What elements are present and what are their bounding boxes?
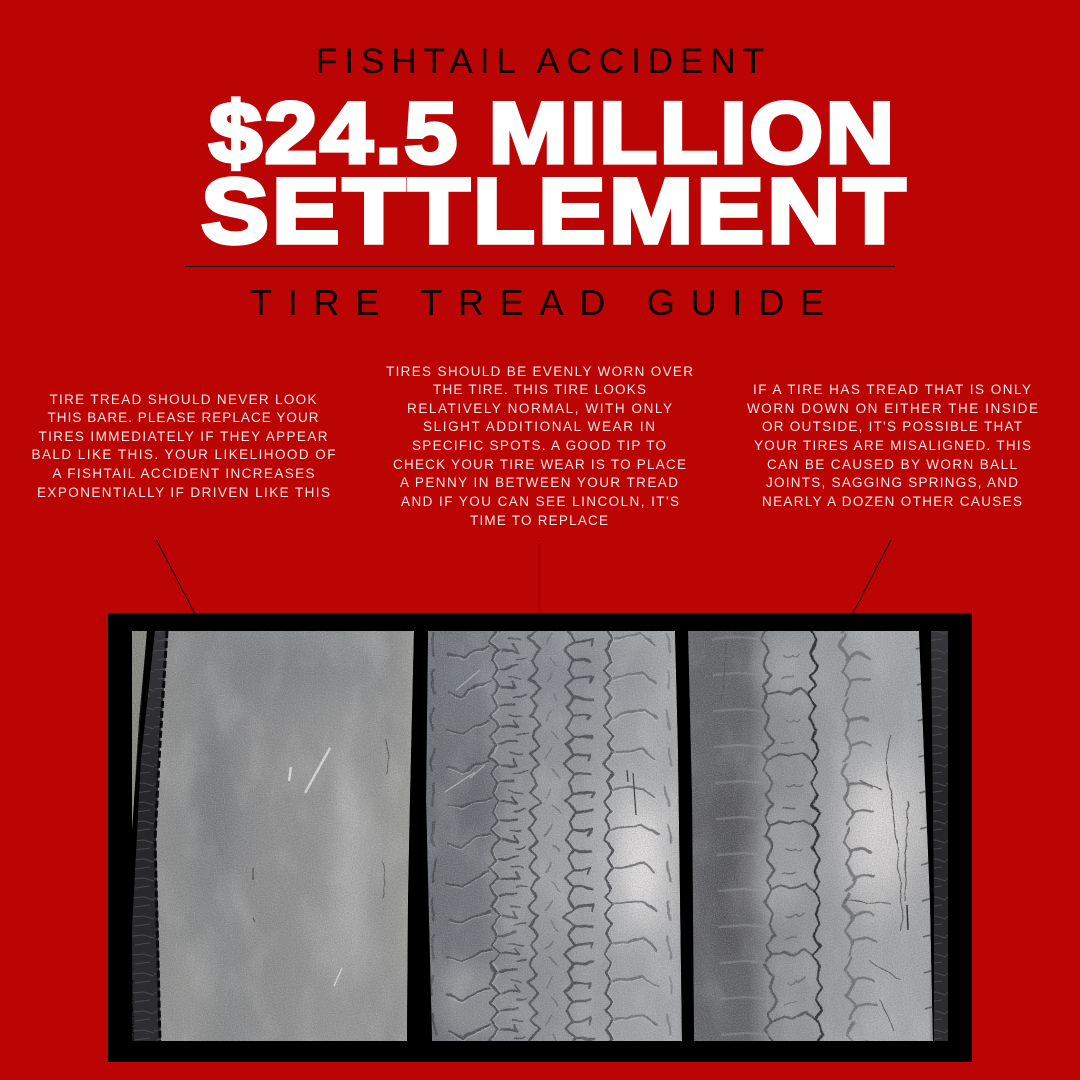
text block: evenly worn tire: SLIGHT ADDITIONAL WEAR IN	[423, 419, 655, 434]
photo of tires	[132, 625, 948, 1060]
subheading: Tire Tread Guide: TIRE TREAD GUIDE	[250, 282, 824, 323]
photo panel: black frame with three tires	[108, 613, 972, 1062]
connector line: center text to normal tire	[538, 540, 540, 613]
main title line: $24.5 Million: $24.5 MILLION	[209, 85, 897, 182]
text block: misaligned tire: CAN BE CAUSED BY WORN BALL	[767, 457, 1017, 472]
text block: misaligned tire: WORN DOWN ON EITHER THE INSIDE	[747, 401, 1038, 416]
tire two: even wear tread	[420, 625, 690, 1047]
eyebrow heading: Fishtail Accident: FISHTAIL ACCIDENT	[316, 42, 764, 81]
text block: evenly worn tire: TIRES SHOULD BE EVENLY WORN OVER	[386, 364, 693, 379]
text block: misaligned tire	[747, 382, 1038, 509]
text block: evenly worn tire	[386, 364, 693, 528]
connector line: left text to bald tire	[156, 540, 194, 613]
text block: bald tire: THIS BARE. PLEASE REPLACE YOUR	[48, 410, 319, 425]
text block: misaligned tire: IF A TIRE HAS TREAD THAT IS ONLY	[753, 382, 1031, 397]
text block: evenly worn tire: CHECK YOUR TIRE WEAR IS TO PLACE	[393, 457, 686, 472]
main title line: Settlement: SETTLEMENT	[201, 160, 909, 262]
black gaps between tires	[132, 631, 934, 1041]
right sidewall	[931, 631, 948, 1041]
surface mottling light	[155, 631, 930, 1041]
text block: bald tire: EXPONENTIALLY IF DRIVEN LIKE THIS	[37, 485, 330, 500]
text block: evenly worn tire: TIME TO REPLACE	[470, 513, 608, 528]
text block: evenly worn tire: THE TIRE. THIS TIRE LOOKS	[433, 382, 646, 397]
far left tire sliver	[132, 631, 147, 830]
divider rule	[185, 266, 895, 267]
text block: bald tire: BALD LIKE THIS. YOUR LIKELIHOOD OF	[32, 447, 336, 462]
text block: evenly worn tire: RELATIVELY NORMAL, WITH ONLY	[407, 401, 672, 416]
text block: bald tire: TIRES IMMEDIATELY IF THEY APPEAR	[38, 429, 328, 444]
left sidewall	[132, 631, 168, 1041]
header: titles and divider	[185, 42, 909, 323]
photo frame	[108, 613, 972, 1062]
text block: misaligned tire: YOUR TIRES ARE MISALIGNED. THIS	[754, 438, 1031, 453]
text block: evenly worn tire: AND IF YOU CAN SEE LINCOLN, IT'S	[401, 494, 679, 509]
text block: evenly worn tire: A PENNY IN BETWEEN YOUR TREAD	[400, 475, 678, 490]
tire one: bald tread	[150, 631, 420, 1060]
text block: evenly worn tire: SPECIFIC SPOTS. A GOOD TIP TO	[412, 438, 666, 453]
text block: misaligned tire: OR OUTSIDE, IT'S POSSIBLE THAT	[762, 419, 1022, 434]
text block: bald tire: A FISHTAIL ACCIDENT INCREASES	[52, 466, 314, 481]
surface grain dark	[132, 631, 948, 1041]
text block: misaligned tire: NEARLY A DOZEN OTHER CAUSES	[762, 494, 1022, 509]
surface grain light	[132, 631, 948, 1041]
connector line: right text to misaligned tire	[853, 540, 891, 613]
tire three: misaligned tread	[686, 625, 936, 1047]
text block: misaligned tire: JOINTS, SAGGING SPRINGS, AND	[766, 475, 1018, 490]
surface mottling dark	[340, 969, 342, 973]
text block: bald tire: TIRE TREAD SHOULD NEVER LOOK	[50, 392, 316, 407]
text block: bald tire	[32, 392, 336, 500]
